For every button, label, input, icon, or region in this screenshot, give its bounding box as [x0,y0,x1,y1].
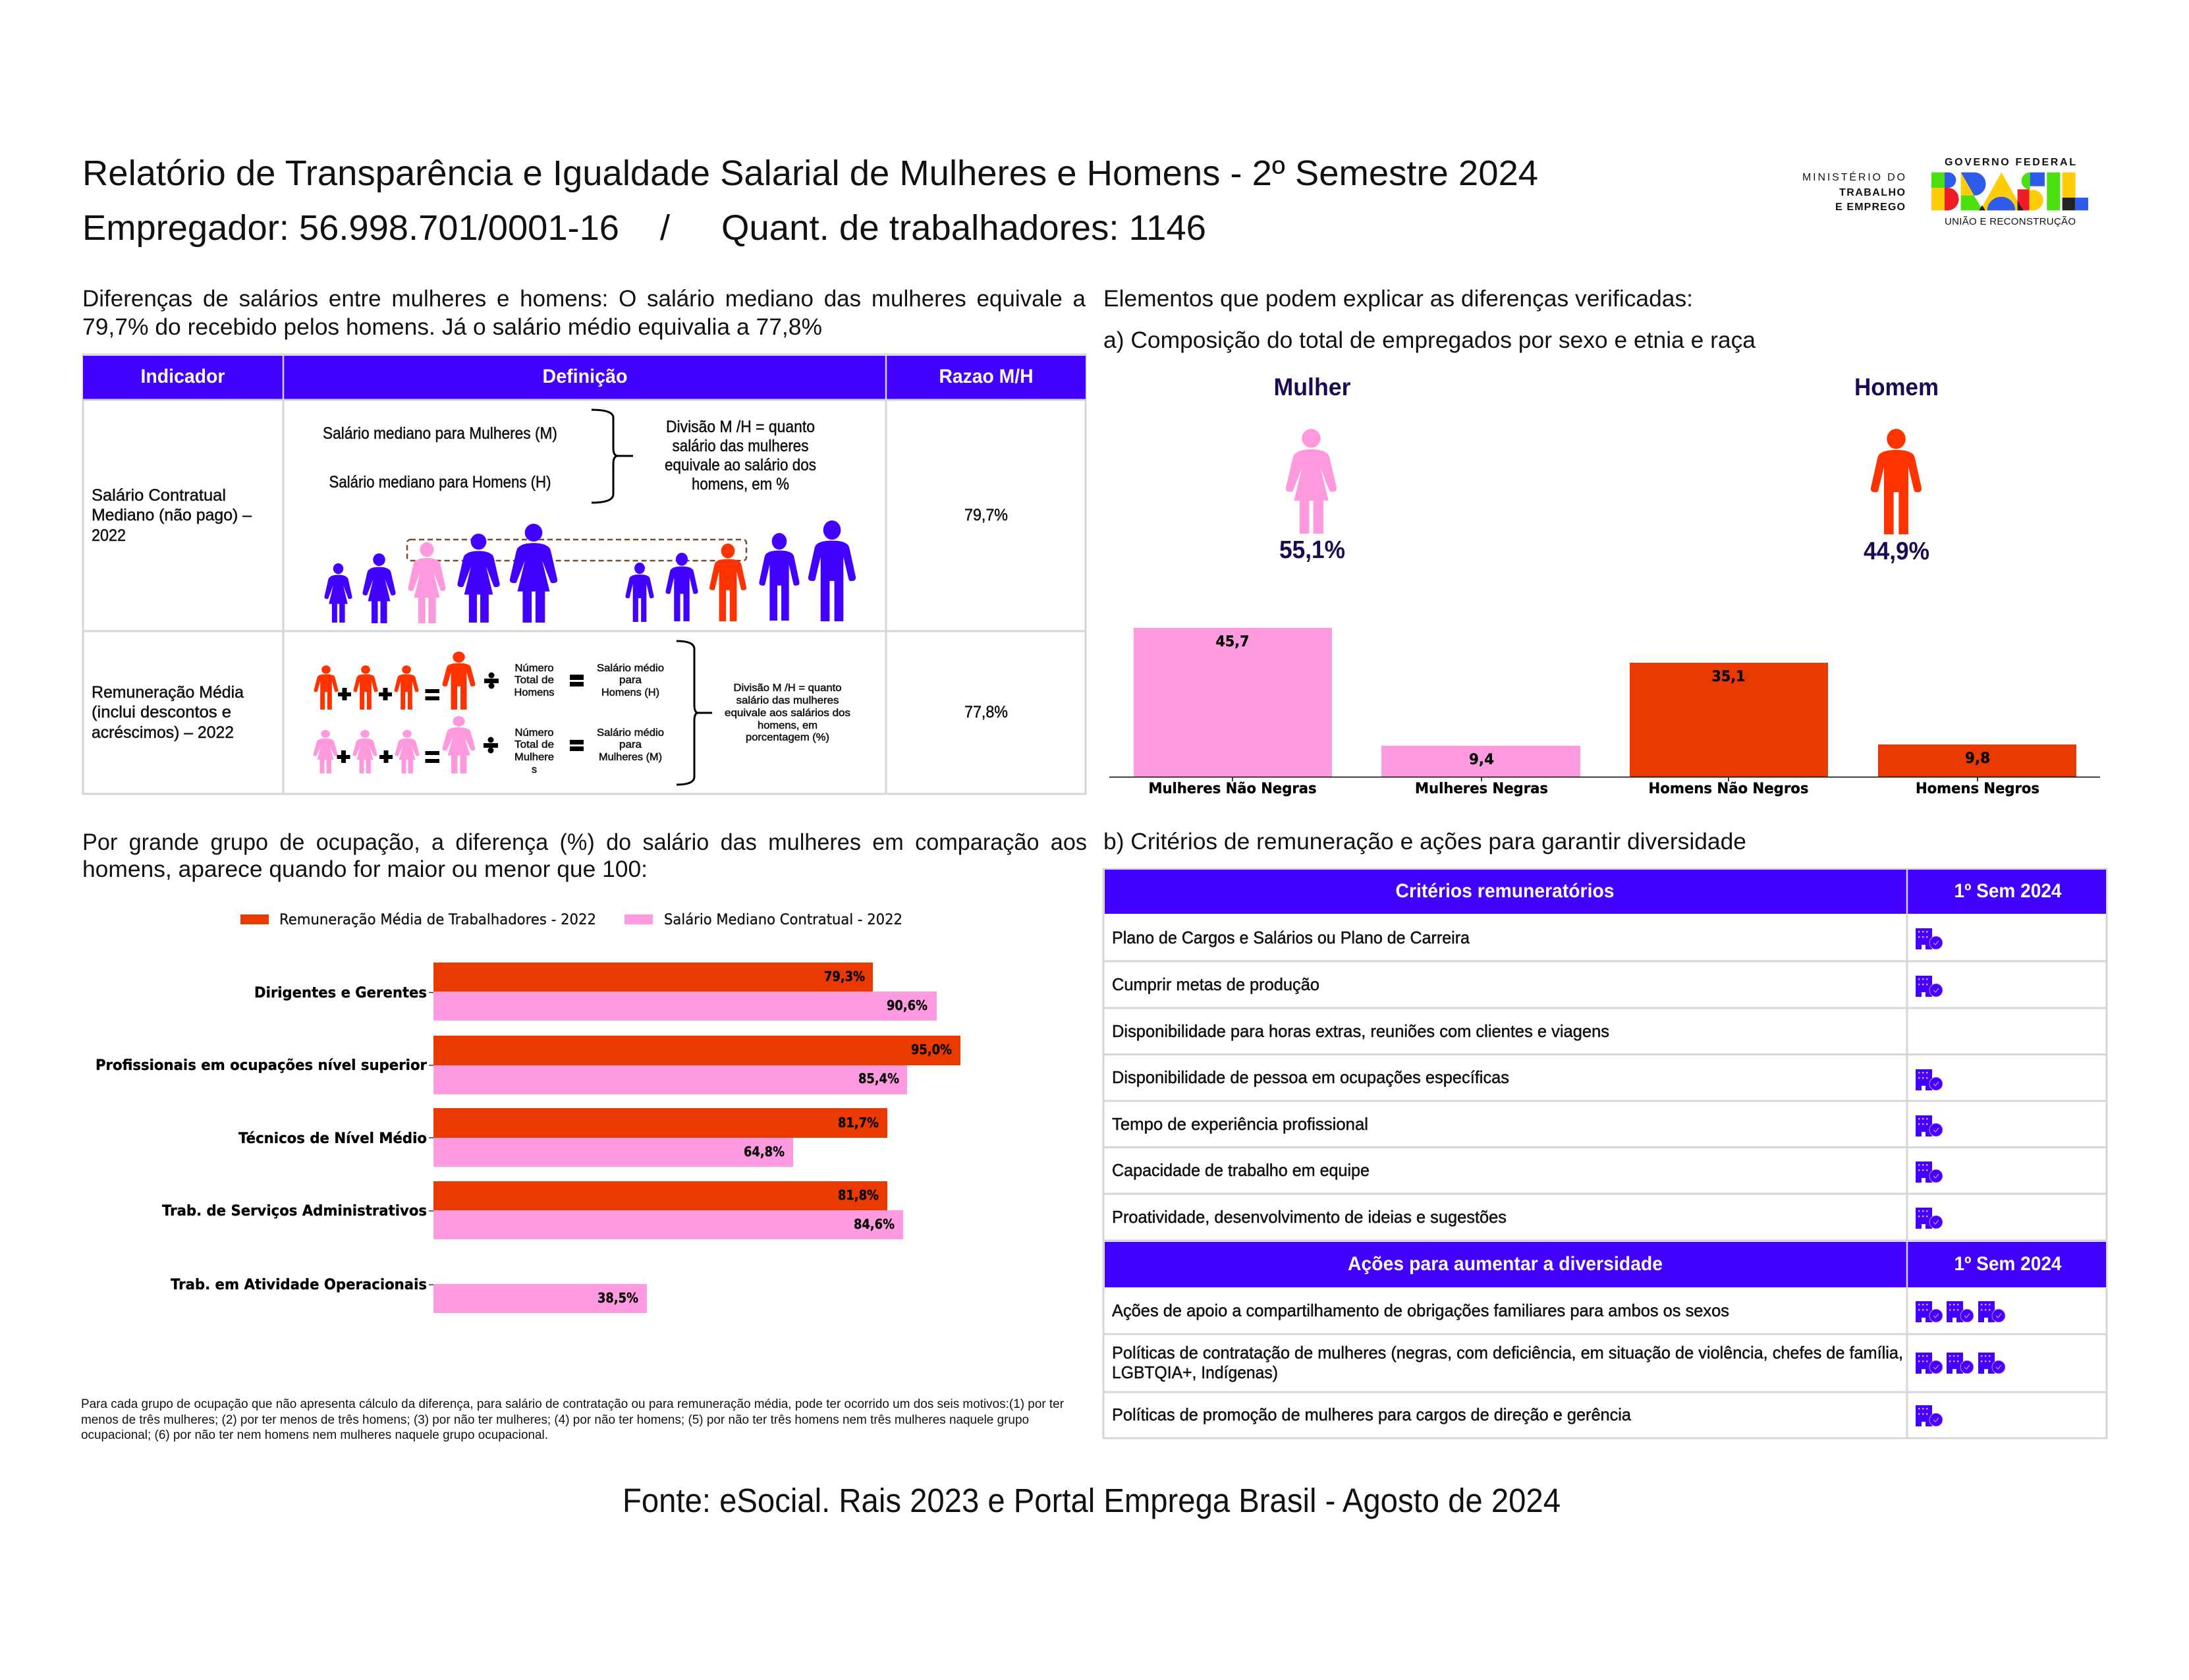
heading: elementos que podem explicar: a) Composição do total de empregados por sexo e etnia e raça [1103,327,1756,353]
table header: Indicador [141,366,225,387]
panel: homem: Homem [1854,374,1939,401]
text: diferenças de salários: Diferenças de salários entre mulheres e homens: O salário mediano das mulheres equivale a [82,286,1086,312]
division text: homens, em % [692,475,789,493]
brace e divisão M/H: equivale aos salários dos [725,708,850,719]
definição: salário mediano: Salário mediano para Homens (H) [329,473,551,491]
title: / [660,208,670,248]
rows: critérios: Cumprir metas de produção [1112,974,1319,994]
bar chart: composição por sexo e raça: 45,7 [1216,634,1249,650]
value: 79,7%: 79,7% [964,506,1008,524]
row label: remuneração média [92,683,244,742]
table header: critérios remuneratórios: 1º Sem 2024 [1954,880,2062,902]
logo: ministério e governo federal: GOVERNO FEDERAL [1945,157,2076,168]
legend: Salário Mediano Contratual - 2022 [664,912,902,928]
rows: ações: LGBTQIA+, Indígenas) [1112,1362,1278,1382]
table header: ações para aumentar a diversidade [1105,1242,2106,1287]
panel: homem: 44,9% [1864,538,1929,565]
bar chart: composição por sexo e raça: Homens Negros [1916,781,2039,797]
equação: mulheres: Total de [514,739,554,750]
division text: equivale ao salário dos [665,456,816,474]
division text [665,418,816,493]
equação: homens: Homens [514,687,555,698]
logo: ministério e governo federal: MINISTÉRIO DO [1802,171,1905,183]
bar chart: diferença por grupo de ocupação: 81,7% [838,1115,879,1131]
text: diferenças de salários: 79,7% do recebido pelos homens. Já o salário médio equivalia a 77,8% [82,314,822,340]
rows: ações: Ações de apoio a compartilhamento de obrigações familiares para ambos os sexos [1112,1301,1729,1320]
rows: ações: Políticas de contratação de mulheres (negras, com deficiência, em situação de violência, chefes de família, [1112,1343,1903,1362]
bar chart: diferença por grupo de ocupação: Trab. de Serviços Administrativos [162,1203,427,1219]
equação: homens: para [619,675,642,686]
bar chart: composição por sexo e raça: Homens Não Negros [1648,781,1809,797]
definição: salário mediano [323,410,816,503]
rows: critérios: Capacidade de trabalho em equipe [1112,1160,1370,1180]
heading: elementos que podem explicar [1103,286,1756,353]
table header: Razao M/H [939,366,1033,387]
equação: homens: Número [515,663,554,674]
icon: homem [1871,429,1922,534]
bar chart: diferença por grupo de ocupação: Profissionais em ocupações nível superior [96,1057,427,1074]
icons: fila de pessoas [324,520,856,623]
footnote: menos de três mulheres; (2) por ter menos de três homens; (3) por não ter mulheres; (4) por não ter homens; (5) por não ter três homens nem três mulheres naquele grupo [81,1413,1029,1427]
panel: mulher: Mulher [1274,374,1350,401]
title: Relatório de Transparência e Igualdade Salarial de Mulheres e Homens - 2º Semestre 2024 [82,154,1538,193]
icon: mulher [1286,429,1337,534]
table header [83,356,1086,399]
row label: salário contratual: Salário Contratual [92,486,226,505]
bar chart: composição por sexo e raça: Mulheres Negras [1415,781,1548,797]
table header: critérios remuneratórios: Critérios remuneratórios [1395,880,1614,902]
bar chart: diferença por grupo de ocupação: 95,0% [911,1042,952,1057]
equação: homens: Homens (H) [601,687,659,698]
rows: critérios: Plano de Cargos e Salários ou Plano de Carreira [1112,928,1470,947]
division text: salário das mulheres [672,437,809,455]
bar chart: diferença por grupo de ocupação: 38,5% [597,1290,638,1306]
row label: salário contratual [92,486,252,545]
equação: mulheres: s [532,764,537,775]
text: por grande grupo de ocupação: homens, aparece quando for maior ou menor que 100: [82,856,648,882]
title [82,154,1538,248]
brace e divisão M/H [677,641,850,785]
brace e divisão M/H: porcentagem (%) [746,732,829,743]
heading: elementos que podem explicar: Elementos que podem explicar as diferenças verificadas: [1103,286,1693,312]
heading: critérios de remuneração: b) Critérios de remuneração e ações para garantir diversidade [1103,829,1746,854]
bar chart: composição por sexo e raça: 9,8 [1965,750,1990,767]
bar chart: diferença por grupo de ocupação: 85,4% [858,1071,899,1086]
division text: Divisão M /H = quanto [666,418,815,436]
brace e divisão M/H: Divisão M /H = quanto [734,683,842,694]
equação: mulheres: para [619,739,642,750]
bar chart: diferença por grupo de ocupação: Dirigentes e Gerentes [254,985,427,1001]
bar chart: diferença por grupo de ocupação: 84,6% [854,1216,895,1232]
bar chart: diferença por grupo de ocupação [96,963,960,1313]
panel: tabela de critérios e ações [1103,869,2107,1438]
bar chart: composição por sexo e raça: 9,4 [1469,752,1494,768]
panel: tabela de indicadores [83,354,1086,794]
panel: homem [1854,374,1939,565]
title: Empregador: 56.998.701/0001-16 [82,208,619,248]
row label: remuneração média: acréscimos) – 2022 [92,723,234,742]
value: 77,8%: 77,8% [964,703,1008,721]
table header: Definição [543,366,627,387]
legend: Remuneração Média de Trabalhadores - 2022 [279,912,596,928]
row label: salário contratual: 2022 [92,526,126,545]
panel: mulher [1274,374,1350,564]
bar chart: diferença por grupo de ocupação: 90,6% [887,997,928,1013]
text: diferenças de salários [82,286,1086,340]
bar chart: composição por sexo e raça: 35,1 [1711,669,1746,685]
bar chart: diferença por grupo de ocupação: 79,3% [824,968,865,984]
rows: ações [1112,1301,1903,1424]
equação: homens [314,652,664,710]
equação: homens: Total de [514,675,554,686]
table header: critérios remuneratórios [1105,870,2106,914]
rows: critérios: Tempo de experiência profissional [1112,1114,1368,1134]
logo: ministério e governo federal: TRABALHO [1839,187,1905,198]
row label: remuneração média: Remuneração Média [92,683,244,702]
equação: mulheres [313,716,664,775]
logo: ministério e governo federal [1802,157,2088,227]
logo: ministério e governo federal: E EMPREGO [1835,202,1905,213]
equação: mulheres: Salário médio [597,727,664,739]
bar chart: diferença por grupo de ocupação: 64,8% [744,1144,785,1160]
brace [592,410,633,503]
equação: mulheres: Mulhere [514,752,554,763]
footnote [81,1397,1065,1442]
definição: salário mediano: Salário mediano para Mulheres (M) [323,424,557,443]
source: Fonte: eSocial. Rais 2023 e Portal Emprega Brasil - Agosto de 2024 [623,1482,1561,1519]
brace e divisão M/H: salário das mulheres [736,695,839,706]
bar chart: diferença por grupo de ocupação: 81,8% [838,1187,879,1203]
icons: prédios [1916,928,2005,1426]
text: por grande grupo de ocupação [82,829,1087,882]
logo: ministério e governo federal: UNIÃO E RECONSTRUÇÃO [1945,216,2076,227]
bar chart: composição por sexo e raça [1109,628,2100,797]
rows: critérios: Disponibilidade de pessoa em ocupações específicas [1112,1067,1509,1087]
rows: ações: Políticas de promoção de mulheres para cargos de direção e gerência [1112,1405,1632,1424]
text: por grande grupo de ocupação: Por grande grupo de ocupação, a diferença (%) do salário das mulheres em comparação aos [82,829,1087,855]
rows: critérios: Proatividade, desenvolvimento de ideias e sugestões [1112,1207,1507,1227]
rows: critérios [1112,928,1609,1227]
footnote: ocupacional; (6) por não ter nem homens nem mulheres naquele grupo ocupacional. [81,1428,548,1442]
brace e divisão M/H: homens, em [758,720,817,731]
footnote: Para cada grupo de ocupação que não apresenta cálculo da diferença, para salário de contratação ou para remuneração média, pode ter ocorrido um dos seis motivos:(1) por ter [81,1397,1065,1411]
bar chart: diferença por grupo de ocupação: Trab. em Atividade Operacionais [171,1277,427,1293]
row label: remuneração média: (inclui descontos e [92,703,231,721]
title: Quant. de trabalhadores: 1146 [721,208,1206,248]
table header: ações para aumentar a diversidade: Ações para aumentar a diversidade [1348,1253,1663,1275]
panel: mulher: 55,1% [1279,536,1345,564]
equação: mulheres: Mulheres (M) [599,752,662,763]
legend [240,912,902,928]
table header: ações para aumentar a diversidade: 1º Sem 2024 [1954,1253,2062,1275]
rows: critérios: Disponibilidade para horas extras, reuniões com clientes e viagens [1112,1021,1609,1041]
row label: salário contratual: Mediano (não pago) – [92,506,252,524]
bar chart: diferença por grupo de ocupação: Técnicos de Nível Médio [238,1131,427,1147]
bar chart: composição por sexo e raça: Mulheres Não Negras [1149,781,1316,797]
equação: mulheres: Número [515,727,554,739]
equação: homens: Salário médio [597,663,664,674]
